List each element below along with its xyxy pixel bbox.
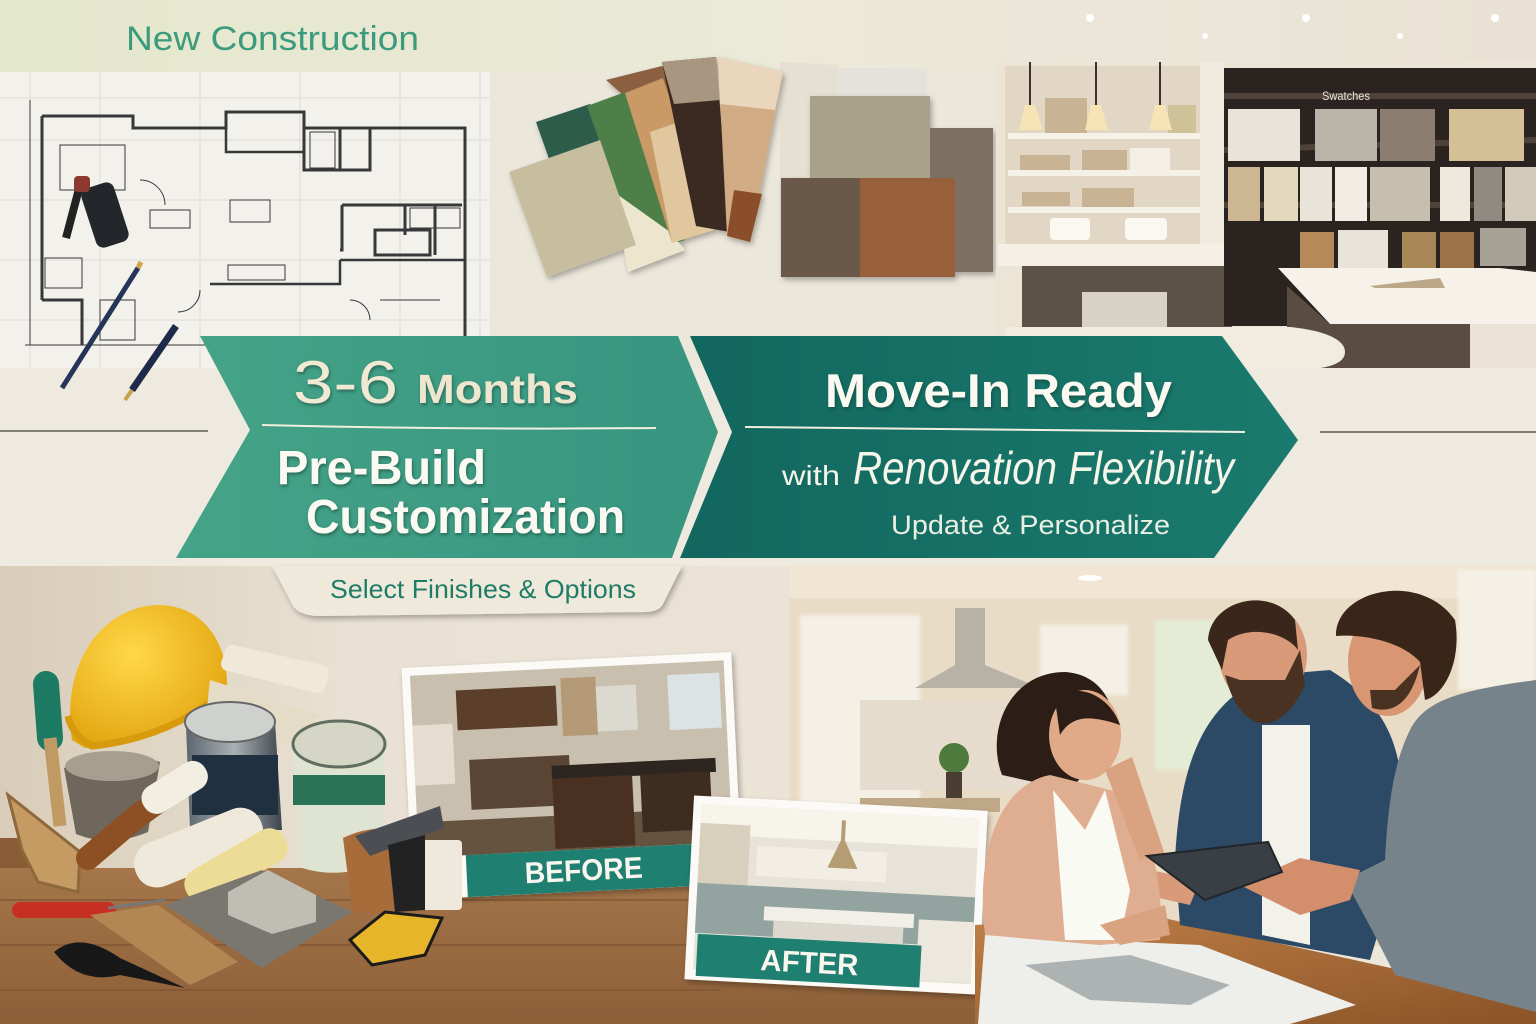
person: man in denim shirt (1140, 600, 1403, 960)
text: with renovation flexibility: with (781, 460, 840, 491)
icon: wooden block and trowel (90, 905, 238, 985)
callout tab: select finishes: Select Finishes & Options (330, 574, 636, 604)
icon: white bin (412, 840, 462, 910)
person: woman (983, 672, 1170, 945)
icon: screwdriver (20, 900, 165, 910)
panel: table and plans (975, 915, 1536, 1024)
icon: tablet (1147, 842, 1282, 900)
icon: paint rollers (88, 756, 293, 910)
heading: New Construction: New Construction (126, 20, 419, 58)
icon: cordless drill (350, 806, 444, 965)
cabinets (800, 570, 1536, 805)
panel: blueprint floor plan (0, 72, 490, 368)
label: after (696, 934, 922, 988)
icon: tape measure on blueprint (66, 176, 131, 250)
icon: paint can dark (185, 702, 282, 830)
top header strip (0, 0, 1536, 72)
arrow: move-in ready (680, 336, 1298, 558)
label: before (466, 844, 700, 897)
icon: roller on wall (205, 652, 322, 745)
timeframe: 3-6 months: Months (417, 366, 578, 412)
heading: move-in ready: Move-In Ready (825, 364, 1172, 417)
panel: kitchen background (790, 566, 1536, 946)
icon: wicker basket (8, 795, 80, 892)
swatch fan: paint strips (509, 57, 783, 277)
timeframe: 3-6 months: 3-6 (293, 349, 398, 416)
photo: after kitchen (684, 795, 988, 995)
shelves (1008, 133, 1200, 213)
lower left soft counter (1005, 327, 1345, 370)
sample wall: Swatches (1322, 89, 1370, 103)
panel: material swatches (509, 57, 993, 277)
panel: renovation tools (8, 605, 462, 988)
icon: bucket (64, 755, 160, 841)
range hood (915, 608, 1040, 688)
label: before: BEFORE (524, 852, 643, 890)
icon: scissors (54, 942, 185, 988)
timeframe: 3-6 months (293, 349, 578, 416)
sample wall (1224, 68, 1536, 326)
person: man in gray shirt (1240, 591, 1536, 1012)
pendant lights (1019, 62, 1172, 130)
swatch: textured and wood samples (781, 96, 993, 277)
panel: design showroom (996, 62, 1536, 370)
panel: bottom-left wall and floor (0, 566, 1000, 1024)
heading: pre-build customization: Pre-Build (277, 442, 486, 495)
heading: pre-build customization: Customization (306, 491, 625, 544)
photo: before kitchen (402, 652, 743, 900)
text: with renovation flexibility: Renovation Flexibility (853, 442, 1237, 494)
island (1278, 268, 1536, 324)
arrow: pre-build customization (176, 336, 718, 558)
heading: pre-build customization (277, 442, 625, 544)
icon: pencil and pen (62, 262, 176, 400)
plan sheet (978, 935, 1356, 1024)
icon: metal trays (165, 870, 352, 968)
icon: paint can light (292, 721, 385, 873)
middle band (0, 368, 1536, 568)
label: after: AFTER (760, 944, 860, 982)
callout tab: select finishes (272, 566, 682, 616)
plant (939, 743, 969, 773)
text: update and personalize: Update & Personalize (891, 510, 1170, 540)
icon: yellow hard hat (68, 605, 227, 748)
icon: brush (46, 684, 60, 826)
counter (998, 244, 1248, 266)
icon: clay pot (343, 829, 395, 914)
